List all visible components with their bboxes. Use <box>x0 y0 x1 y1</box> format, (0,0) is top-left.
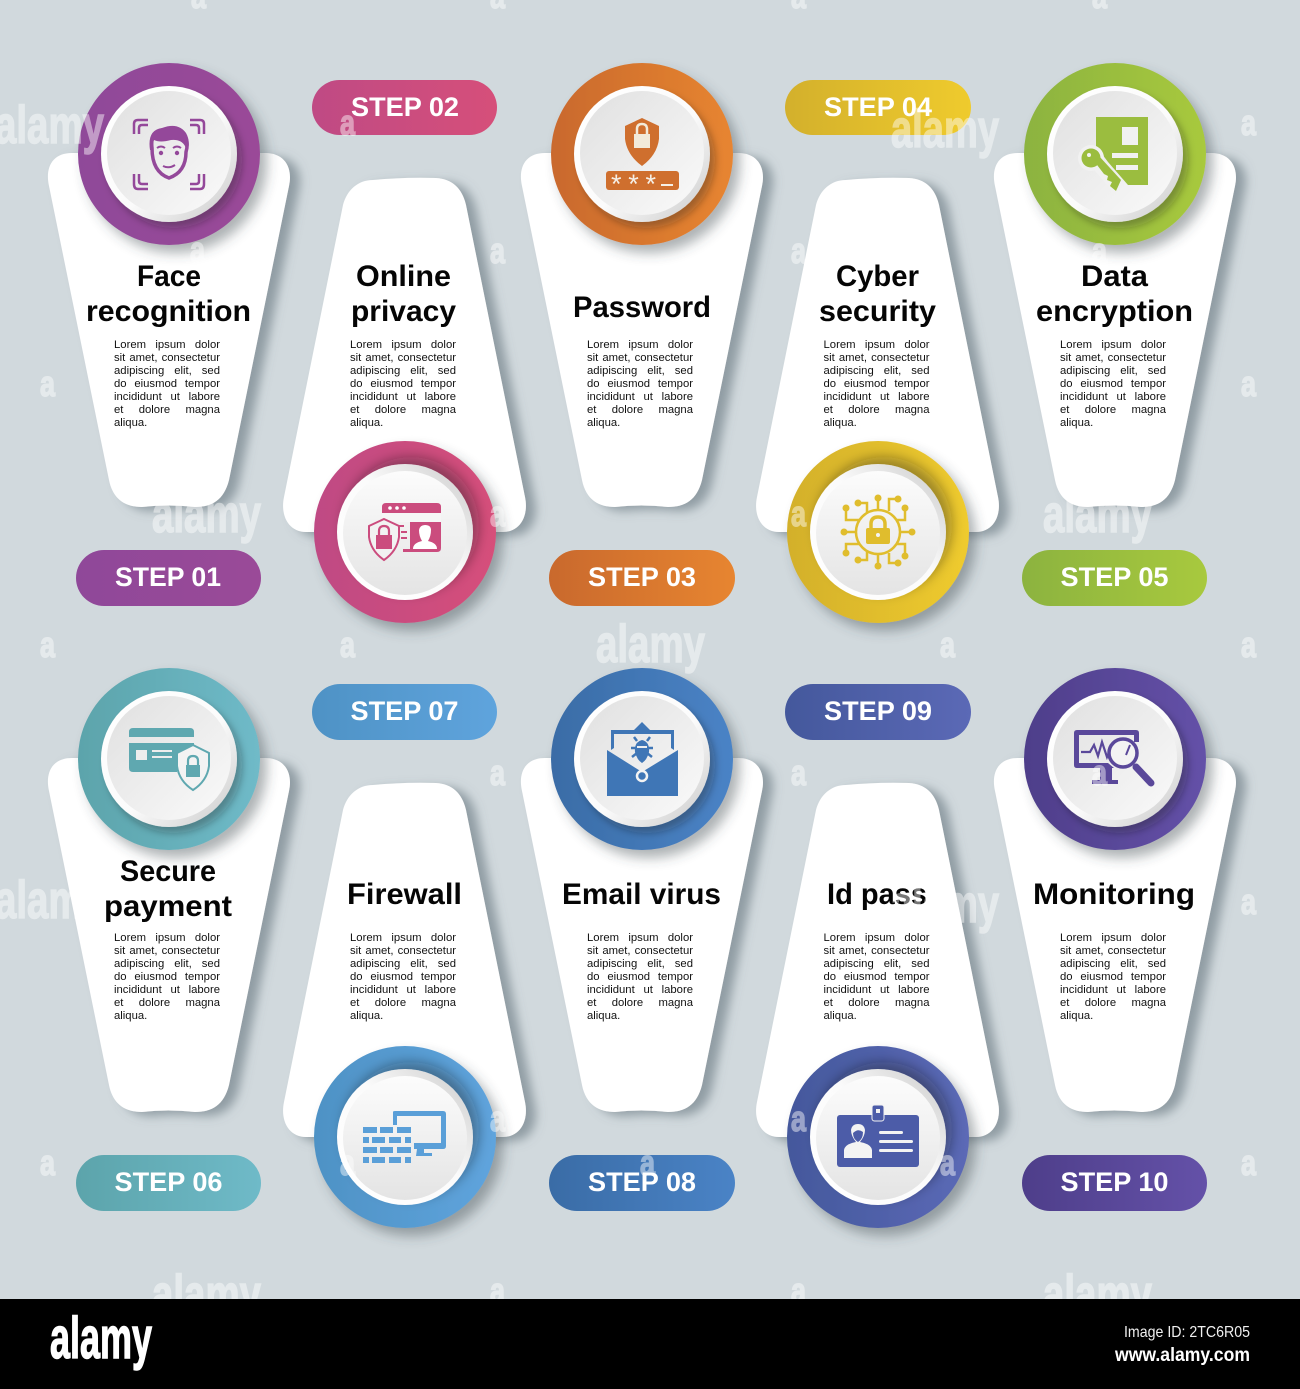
pill label: step 08: STEP 08 <box>588 1167 696 1197</box>
text block: step 05: aliqua. <box>1060 417 1093 429</box>
ring: step 05 <box>1024 63 1206 245</box>
watermarks: a <box>1241 102 1257 143</box>
pill: step 06 <box>76 1155 261 1211</box>
text block: step 01: Lorem ipsum dolor <box>114 339 220 351</box>
panel: step 08 email virus <box>521 668 763 1211</box>
watermarks: a <box>791 1098 807 1139</box>
card: step 02 <box>283 178 526 532</box>
watermarks: a <box>40 1142 56 1183</box>
text block: step 04: do eiusmod tempor <box>824 378 930 390</box>
text block: step 04 <box>824 339 930 431</box>
heading: step 04: Cyber <box>836 260 919 293</box>
text block: step 05: incididunt ut labore <box>1060 391 1166 403</box>
heading: step 06: Secure <box>120 855 216 888</box>
ring: step 09 <box>787 1046 969 1228</box>
panel: step 04 cyber security <box>756 80 999 623</box>
panel: step 10 monitoring <box>994 668 1236 1211</box>
text block: step 04: adipiscing elit, sed <box>824 365 930 377</box>
icon: circuit lock <box>840 494 916 570</box>
watermarks: alamy <box>596 615 705 674</box>
text block: step 05: do eiusmod tempor <box>1060 378 1166 390</box>
text block: step 09: Lorem ipsum dolor <box>824 932 930 944</box>
text block: step 05: adipiscing elit, sed <box>1060 365 1166 377</box>
card: step 10 <box>994 758 1236 1112</box>
text block: step 09: adipiscing elit, sed <box>824 958 930 970</box>
heading: step 05: Data <box>1081 260 1148 293</box>
text block: step 08 <box>587 932 694 1024</box>
disc: step 06 <box>101 691 237 827</box>
text block: step 09: sit amet, consectetur <box>824 945 930 957</box>
icon: face scan <box>134 120 204 189</box>
text block: step 03: Lorem ipsum dolor <box>587 339 693 351</box>
text block: step 03: aliqua. <box>587 417 620 429</box>
pill: step 04 <box>785 80 971 135</box>
icon: infected email <box>607 722 678 796</box>
watermarks: alamy <box>891 875 999 934</box>
watermarks: alamy <box>152 485 261 544</box>
ring: step 06 <box>78 668 260 850</box>
text block: step 08: et dolore magna <box>587 997 693 1009</box>
pill: step 10 <box>1022 1155 1207 1211</box>
icon: monitor with magnifier <box>1074 730 1151 784</box>
icon: password shield <box>606 118 679 199</box>
watermarks: a <box>40 624 56 665</box>
pill: step 02 <box>312 80 497 135</box>
watermarks: a <box>490 752 506 793</box>
text block: step 04: et dolore magna <box>824 404 930 416</box>
text block: step 10: sit amet, consectetur <box>1060 945 1166 957</box>
text block: step 07 <box>350 932 457 1024</box>
heading: step 06: payment <box>104 890 232 923</box>
heading: step 03: Password <box>573 291 711 324</box>
panel: step 06 secure payment <box>48 668 290 1211</box>
text block: step 08: sit amet, consectetur <box>587 945 693 957</box>
text block: step 06: et dolore magna <box>114 997 220 1009</box>
pill: step 08 <box>549 1155 735 1211</box>
text block: step 02: et dolore magna <box>350 404 456 416</box>
text block: step 05 <box>1060 339 1167 431</box>
disc: step 03 <box>574 86 710 222</box>
pill label: step 04: STEP 04 <box>824 92 932 122</box>
text block: step 06: adipiscing elit, sed <box>114 958 220 970</box>
watermarks: a <box>1241 1142 1257 1183</box>
heading: step 07: Firewall <box>347 878 462 911</box>
icon: password shield: *** <box>611 169 656 199</box>
text block: step 02: aliqua. <box>350 417 383 429</box>
text block: step 08: incididunt ut labore <box>587 984 693 996</box>
watermarks: alamy <box>1043 1265 1152 1324</box>
ring: step 08 <box>551 668 733 850</box>
text block: step 03: adipiscing elit, sed <box>587 365 693 377</box>
heading: step 08: Email virus <box>562 878 721 911</box>
text block: step 04: incididunt ut labore <box>824 391 930 403</box>
ring: step 03 <box>551 63 733 245</box>
text block: step 02: incididunt ut labore <box>350 391 456 403</box>
text block: step 09: aliqua. <box>824 1010 857 1022</box>
text block: step 07: Lorem ipsum dolor <box>350 932 456 944</box>
text block: step 06: do eiusmod tempor <box>114 971 220 983</box>
text block: step 01 <box>114 339 221 431</box>
text block: step 01: et dolore magna <box>114 404 220 416</box>
icon: document and key <box>1078 117 1148 191</box>
image id: Image ID: 2TC6R05 <box>1124 1324 1250 1341</box>
card: step 07 <box>283 783 526 1137</box>
pill label: step 10: STEP 10 <box>1060 1167 1168 1197</box>
text block: step 02: do eiusmod tempor <box>350 378 456 390</box>
icon: browser with shield and user <box>369 503 441 560</box>
text block: step 05: sit amet, consectetur <box>1060 352 1166 364</box>
heading: step 01: Face <box>137 260 201 293</box>
footer logo: alamy <box>50 1306 152 1371</box>
watermarks: a <box>40 363 56 404</box>
watermarks: a <box>340 102 356 143</box>
panel: step 09 id pass <box>756 684 999 1228</box>
card: step 03 <box>521 153 763 507</box>
heading: step 02: Online <box>356 260 451 293</box>
panel: step 02 online privacy <box>283 80 526 623</box>
text block: step 07: aliqua. <box>350 1010 383 1022</box>
watermarks: a <box>1241 363 1257 404</box>
pill: step 07 <box>312 684 497 740</box>
watermarks: a <box>791 230 807 271</box>
card: step 06 <box>48 758 290 1112</box>
ring: step 02 <box>314 441 496 623</box>
disc: step 05 <box>1047 86 1183 222</box>
heading: step 04: security <box>819 295 936 328</box>
pill: step 09 <box>785 684 971 740</box>
text block: step 07: adipiscing elit, sed <box>350 958 456 970</box>
text block: step 10: aliqua. <box>1060 1010 1093 1022</box>
heading: step 10: Monitoring <box>1033 878 1195 911</box>
text block: step 02 <box>350 339 457 431</box>
text block: step 01: aliqua. <box>114 417 147 429</box>
watermarks: a <box>490 1098 506 1139</box>
watermarks: a <box>1092 752 1108 793</box>
text block: step 01: adipiscing elit, sed <box>114 365 220 377</box>
text block: step 08: Lorem ipsum dolor <box>587 932 693 944</box>
text block: step 07: do eiusmod tempor <box>350 971 456 983</box>
text block: step 06: sit amet, consectetur <box>114 945 220 957</box>
text block: step 04: Lorem ipsum dolor <box>824 339 930 351</box>
ring: step 01 <box>78 63 260 245</box>
text block: step 02: adipiscing elit, sed <box>350 365 456 377</box>
disc: step 04 <box>810 464 946 600</box>
pill label: step 02: STEP 02 <box>351 92 459 122</box>
icon: credit card with shield <box>129 728 209 790</box>
card: step 09 <box>756 783 999 1137</box>
watermarks: a <box>340 1142 356 1183</box>
card: step 01 <box>48 153 290 507</box>
pill label: step 01: STEP 01 <box>115 562 221 592</box>
watermarks: a <box>490 230 506 271</box>
text block: step 03: sit amet, consectetur <box>587 352 693 364</box>
text block: step 10: et dolore magna <box>1060 997 1166 1009</box>
pill label: step 06: STEP 06 <box>114 1167 222 1197</box>
text block: step 10: incididunt ut labore <box>1060 984 1166 996</box>
text block: step 05: Lorem ipsum dolor <box>1060 339 1166 351</box>
text block: step 03: incididunt ut labore <box>587 391 693 403</box>
text block: step 01: incididunt ut labore <box>114 391 220 403</box>
watermarks: a <box>490 1270 506 1311</box>
panel: step 01 face recognition <box>48 63 290 606</box>
pill: step 05 <box>1022 550 1207 606</box>
website: www.alamy.com <box>1114 1345 1250 1366</box>
pill: step 03 <box>549 550 735 606</box>
pill label: step 05: STEP 05 <box>1060 562 1168 592</box>
watermarks: alamy <box>891 100 999 159</box>
text block: step 08: adipiscing elit, sed <box>587 958 693 970</box>
text block: step 09: et dolore magna <box>824 997 930 1009</box>
pill: step 01 <box>76 550 261 606</box>
card: step 08 <box>521 758 763 1112</box>
watermarks: a <box>640 1142 656 1183</box>
text block: step 10 <box>1060 932 1167 1024</box>
text block: step 03: do eiusmod tempor <box>587 378 693 390</box>
text block: step 06: incididunt ut labore <box>114 984 220 996</box>
watermarks: alamy <box>1043 485 1152 544</box>
icon: id badge <box>837 1105 919 1167</box>
text block: step 07: incididunt ut labore <box>350 984 456 996</box>
watermarks: a <box>190 229 206 270</box>
disc: step 02 <box>337 464 473 600</box>
heading: step 01: recognition <box>86 295 251 328</box>
text block: step 10: adipiscing elit, sed <box>1060 958 1166 970</box>
text block: step 06: Lorem ipsum dolor <box>114 932 220 944</box>
pill label: step 03: STEP 03 <box>588 562 696 592</box>
watermarks: a <box>1241 624 1257 665</box>
pill label: step 07: STEP 07 <box>350 696 458 726</box>
text block: step 03 <box>587 339 694 431</box>
disc: step 01 <box>101 86 237 222</box>
text block: step 07: sit amet, consectetur <box>350 945 456 957</box>
card: step 04 <box>756 178 999 532</box>
disc: step 08 <box>574 691 710 827</box>
watermarks: a <box>340 624 356 665</box>
text block: step 07: et dolore magna <box>350 997 456 1009</box>
text block: step 01: sit amet, consectetur <box>114 352 220 364</box>
panel: step 05 data encryption <box>994 63 1236 606</box>
ring: step 07 <box>314 1046 496 1228</box>
card: step 05 <box>994 153 1236 507</box>
watermarks: a <box>490 493 506 534</box>
heading: step 09: Id pass <box>827 878 927 911</box>
icon: firewall and monitor <box>363 1111 446 1163</box>
panel: step 07 firewall <box>283 684 526 1228</box>
footer bar <box>0 1299 1300 1389</box>
ring: step 10 <box>1024 668 1206 850</box>
text block: step 06 <box>114 932 221 1024</box>
text block: step 02: sit amet, consectetur <box>350 352 456 364</box>
text block: step 09: incididunt ut labore <box>824 984 930 996</box>
text block: step 09 <box>824 932 930 1024</box>
text block: step 04: aliqua. <box>824 417 857 429</box>
text block: step 02: Lorem ipsum dolor <box>350 339 456 351</box>
text block: step 10: Lorem ipsum dolor <box>1060 932 1166 944</box>
text block: step 08: do eiusmod tempor <box>587 971 693 983</box>
text block: step 01: do eiusmod tempor <box>114 378 220 390</box>
text block: step 03: et dolore magna <box>587 404 693 416</box>
panel: step 03 password <box>521 63 763 606</box>
watermarks: a <box>791 493 807 534</box>
text block: step 04: sit amet, consectetur <box>824 352 930 364</box>
heading: step 02: privacy <box>351 295 456 328</box>
watermarks: a <box>940 1142 956 1183</box>
watermarks: a <box>940 624 956 665</box>
watermarks: a <box>1241 881 1257 922</box>
watermarks: a <box>791 752 807 793</box>
pill label: step 09: STEP 09 <box>824 696 932 726</box>
text block: step 05: et dolore magna <box>1060 404 1166 416</box>
text block: step 06: aliqua. <box>114 1010 147 1022</box>
disc: step 07 <box>337 1069 473 1205</box>
watermarks: a <box>791 1270 807 1311</box>
ring: step 04 <box>787 441 969 623</box>
watermarks: alamy <box>152 1265 261 1324</box>
disc: step 10 <box>1047 691 1183 827</box>
text block: step 09: do eiusmod tempor <box>824 971 930 983</box>
disc: step 09 <box>810 1069 946 1205</box>
watermarks: a <box>1092 230 1108 271</box>
text block: step 08: aliqua. <box>587 1010 620 1022</box>
heading: step 05: encryption <box>1036 295 1193 328</box>
text block: step 10: do eiusmod tempor <box>1060 971 1166 983</box>
